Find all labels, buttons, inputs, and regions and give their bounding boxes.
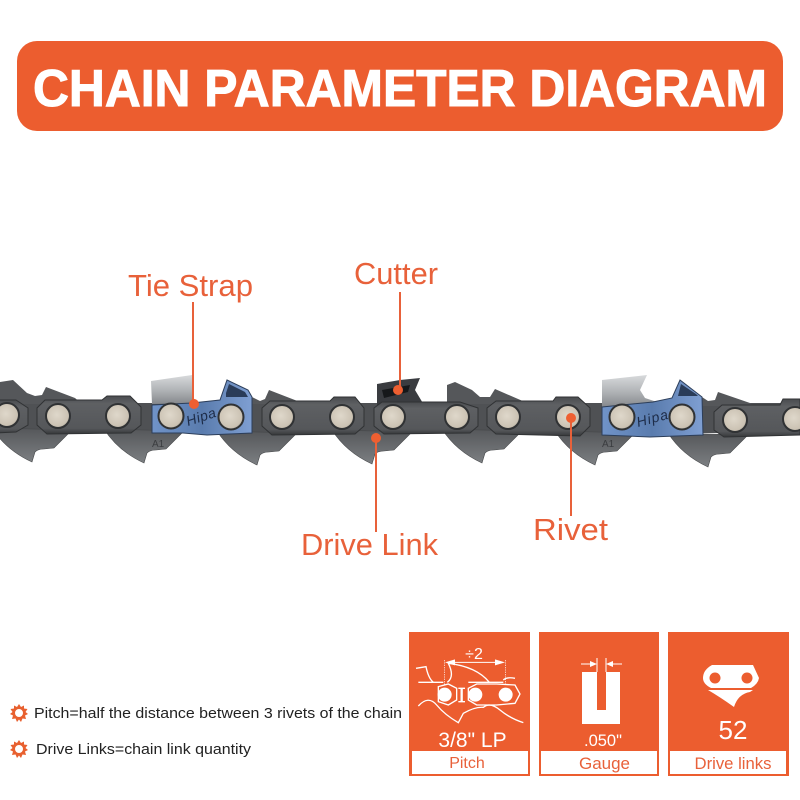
gauge caption (541, 751, 657, 774)
panel: pitch (409, 632, 530, 776)
side link 3 (262, 397, 364, 435)
title banner (17, 41, 783, 131)
gauge caption: Gauge (579, 754, 630, 773)
callout: rivet (533, 413, 608, 547)
side link 5 (487, 397, 590, 436)
side link 1 (37, 396, 141, 434)
panel: gauge (539, 632, 659, 776)
tie strap right blue (602, 380, 703, 437)
left end link (0, 400, 28, 434)
tie strap right blue: Hipa (635, 406, 670, 430)
tie strap right silver cutter (602, 375, 657, 407)
icon: gear bullet (10, 740, 28, 758)
callout: drive link: Drive Link (301, 527, 438, 562)
callout: tie strap: Tie Strap (128, 268, 253, 303)
drive links caption (670, 751, 786, 774)
A1 mark left: A1 (152, 439, 165, 450)
callout: tie strap (128, 268, 253, 409)
icon: chain pitch diagram (416, 659, 523, 723)
icon: gauge groove (581, 658, 622, 724)
callout: cutter (354, 256, 438, 395)
tie strap left silver cutter (151, 375, 200, 404)
pitch caption: Pitch (449, 755, 485, 772)
rivets (0, 403, 800, 432)
cutter centre (374, 378, 478, 434)
saw chain photo illustration (0, 375, 800, 467)
icon: drive link (703, 665, 759, 707)
side link 7 (714, 399, 800, 437)
tie strap left blue (152, 380, 252, 435)
drive link count: 52 (719, 715, 747, 745)
drive link teeth and fins (0, 380, 800, 467)
pitch caption (412, 751, 528, 774)
icon: gear bullet (10, 704, 28, 722)
A1 mark right: A1 (602, 439, 615, 450)
panel: drive links (668, 632, 789, 776)
drive links caption: Drive links (695, 754, 771, 773)
callout: cutter: Cutter (354, 256, 438, 291)
callout: rivet: Rivet (533, 512, 608, 547)
note: pitch: Pitch=half the distance between 3 rivets of the chain (34, 706, 402, 722)
callout: drive link (301, 433, 438, 562)
gauge value: .050" (584, 732, 622, 750)
note: drive links: Drive Links=chain link quantity (36, 742, 252, 758)
tie strap left blue: Hipa (184, 404, 218, 429)
pitch value: 3/8" LP (438, 729, 507, 752)
title banner: CHAIN PARAMETER DIAGRAM (33, 60, 767, 118)
division label: ÷2 (465, 646, 483, 663)
